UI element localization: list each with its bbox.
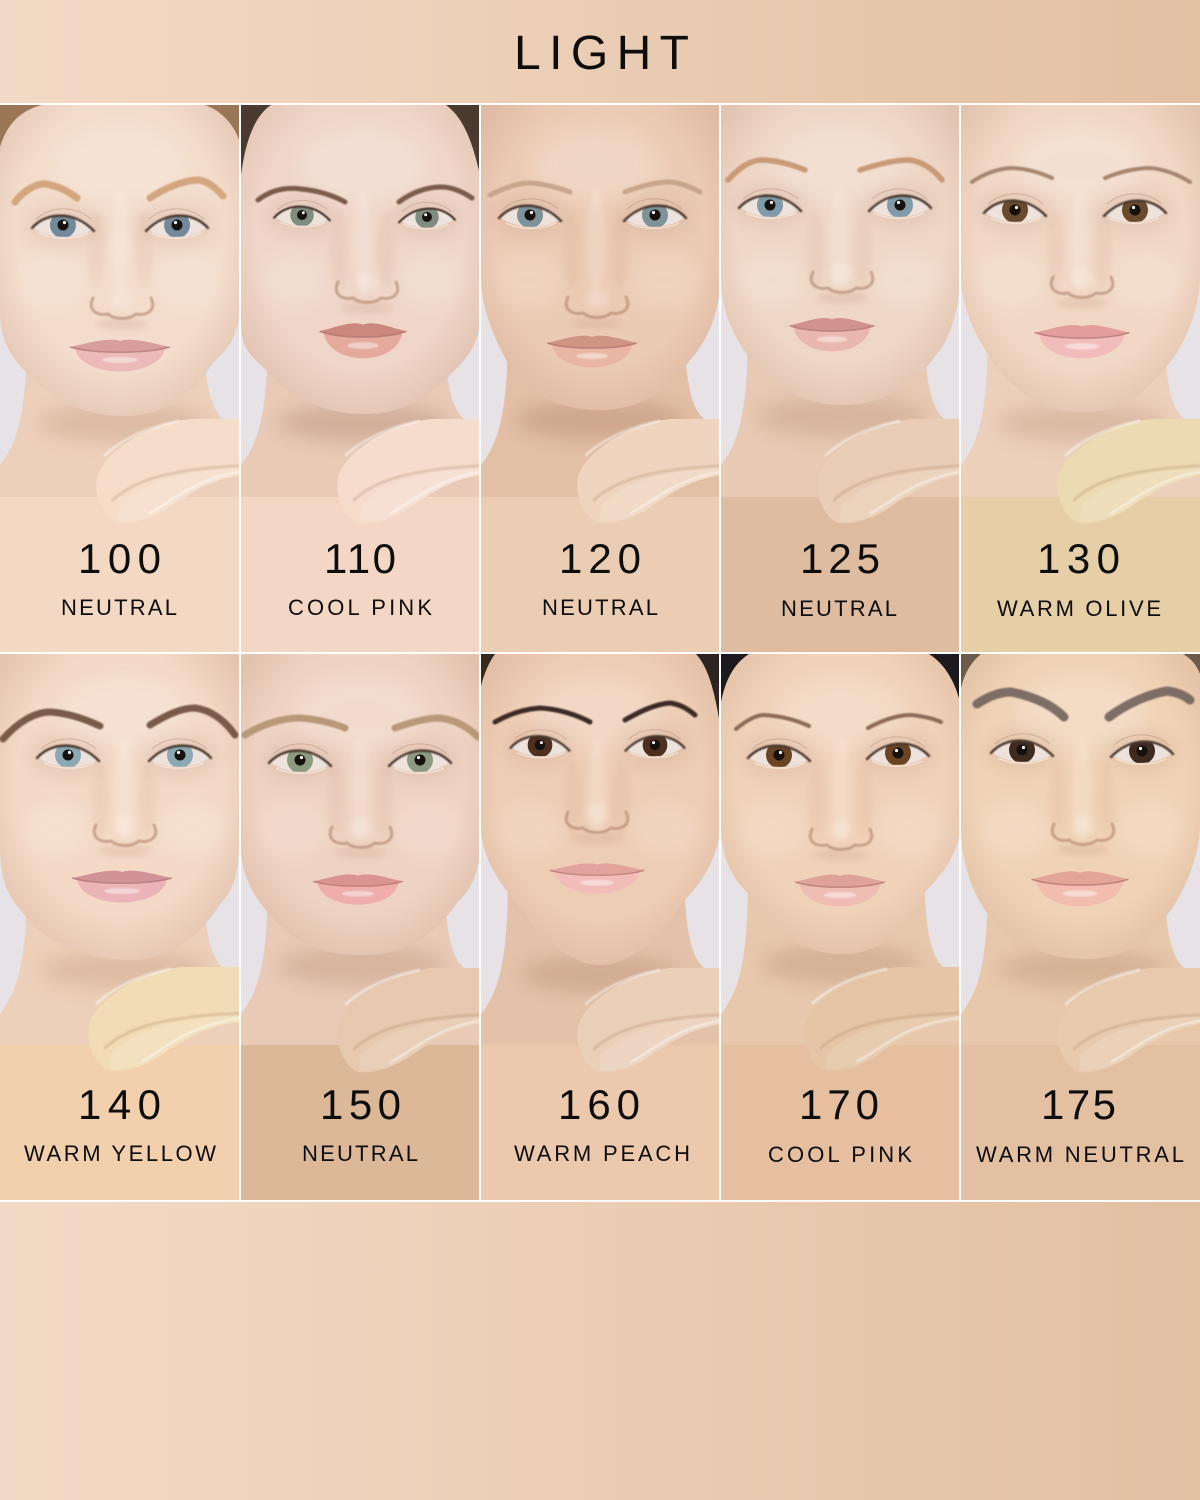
portrait (0, 105, 239, 497)
swatch colour block (961, 1045, 1200, 1200)
panel: shade 125 (721, 105, 959, 652)
swatch colour block (481, 1045, 720, 1200)
portrait (721, 105, 960, 497)
shade number: 150 (320, 1081, 401, 1128)
shade number: 160 (558, 1081, 640, 1128)
panel: shade 175 (961, 654, 1200, 1167)
shade undertone: WARM OLIVE (997, 596, 1161, 621)
panel: shade 100 (0, 105, 239, 620)
swatch colour block (0, 497, 239, 652)
product swipe (337, 968, 501, 1072)
portrait (241, 654, 480, 1046)
shade undertone: WARM YELLOW (24, 1141, 216, 1166)
swatch colour block (241, 497, 480, 652)
panel: shade 130 (961, 105, 1200, 652)
portrait (0, 654, 239, 1046)
shade number: 130 (1037, 535, 1120, 582)
swatch colour block (0, 1045, 239, 1200)
portrait (241, 105, 480, 497)
product swipe (88, 967, 252, 1071)
panel: shade 110 (241, 105, 479, 652)
shade undertone: NEUTRAL (781, 596, 897, 621)
swatch colour block (481, 497, 720, 652)
product swipe (96, 419, 260, 523)
swatch colour block (961, 497, 1200, 652)
shade number: 110 (324, 535, 396, 582)
shade number: 100 (78, 535, 161, 582)
swatch colour block (241, 1045, 480, 1200)
portrait (481, 654, 720, 1046)
shade number: 170 (799, 1081, 879, 1128)
shade number: 175 (1041, 1081, 1116, 1128)
swatch colour block (721, 1045, 960, 1200)
panel: shade 160 (481, 654, 719, 1200)
product swipe (577, 968, 741, 1072)
shade undertone: NEUTRAL (542, 595, 658, 620)
shade undertone: NEUTRAL (61, 595, 177, 620)
product swipe (1057, 419, 1200, 523)
product swipe (817, 419, 981, 523)
shade undertone: COOL PINK (768, 1142, 912, 1167)
portrait (721, 654, 960, 1046)
panel: shade 120 (481, 105, 719, 620)
portrait (961, 654, 1200, 1046)
shade undertone: WARM PEACH (514, 1141, 690, 1166)
product swipe (1057, 968, 1200, 1072)
panel: shade 140 (0, 654, 239, 1200)
swatch colour block (721, 497, 960, 652)
shade undertone: NEUTRAL (302, 1141, 418, 1166)
product swipe (577, 419, 741, 523)
shade number: 120 (559, 535, 641, 582)
shade number: 125 (800, 535, 880, 582)
panel: shade 150 (241, 654, 479, 1200)
shade undertone: WARM NEUTRAL (976, 1142, 1184, 1167)
shade number: 140 (78, 1081, 161, 1128)
portrait (481, 105, 720, 497)
title: LIGHT (514, 27, 689, 80)
portrait (961, 105, 1200, 497)
product swipe (337, 419, 501, 523)
panel: shade 170 (721, 654, 959, 1200)
product swipe (804, 967, 968, 1071)
shade undertone: COOL PINK (288, 595, 432, 620)
